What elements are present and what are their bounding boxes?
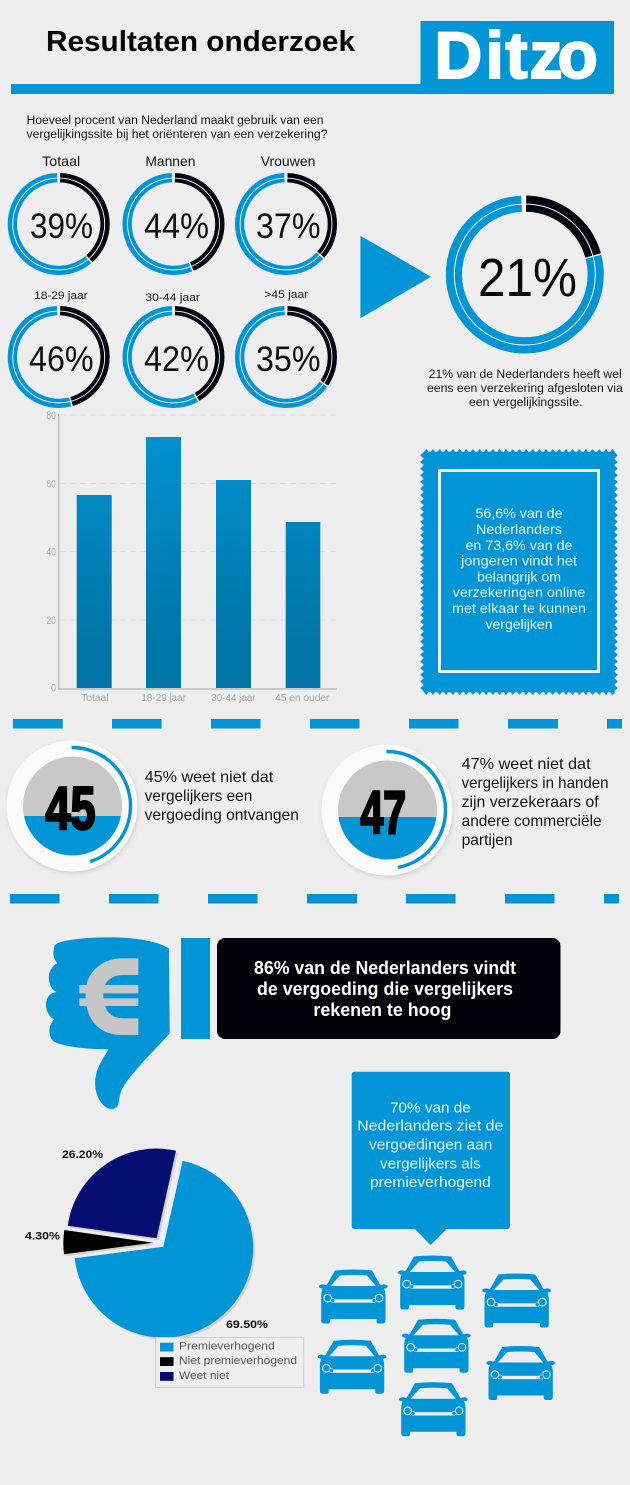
callout: stamp with 56,6% text: Nederlanders xyxy=(476,521,562,537)
pie labels: 69.50% xyxy=(226,1319,268,1331)
donut: Totaal 39%: 39% xyxy=(30,207,93,246)
gauge: 45 xyxy=(6,740,138,874)
gauge: 45: 45 xyxy=(46,775,96,842)
donut: Mannen 44%: Mannen xyxy=(145,153,195,169)
legend: Weet niet xyxy=(179,1370,229,1382)
donut: Totaal 39%: Totaal xyxy=(42,153,80,169)
legend: Niet premieverhogend xyxy=(179,1355,297,1367)
gauge: 47: 47 xyxy=(360,779,406,846)
icon group: cars xyxy=(318,1256,555,1436)
pie slice: Weet niet xyxy=(68,1149,176,1238)
donut: Vrouwen 37% xyxy=(237,153,335,273)
callout: 86% black box: rekenen te hoog xyxy=(313,1000,451,1020)
callout: stamp with 56,6% text: vergelijken xyxy=(486,616,552,632)
callout: 70% speech bubble: Nederlanders ziet de xyxy=(357,1119,503,1135)
chart x axis labels: 18-29 jaar xyxy=(141,693,187,704)
callout: stamp with 56,6% text: jongeren vindt het xyxy=(460,552,577,568)
legend xyxy=(156,1338,304,1388)
chart y axis labels: 80 xyxy=(46,410,56,422)
donut: 18-29 jaar 46%: 18-29 jaar xyxy=(34,290,88,302)
title: Resultaten onderzoek xyxy=(46,26,356,58)
callout: stamp with 56,6% text xyxy=(420,449,618,695)
chart y axis labels: 20 xyxy=(46,615,56,627)
text: 45% xyxy=(145,769,299,824)
donut: 30-44 jaar 42%: 30-44 jaar xyxy=(145,292,200,304)
question text xyxy=(26,115,328,141)
chart x axis labels: 30-44 jaar xyxy=(211,693,256,704)
pie labels: 26.20% xyxy=(62,1149,103,1161)
logo: Ditzo: Ditzo xyxy=(434,18,598,92)
pie slice: Premieverhogend xyxy=(75,1161,253,1338)
chart y axis labels: 0 xyxy=(51,682,56,694)
text: 47%: 47% weet niet dat xyxy=(462,756,591,773)
chart y axis labels xyxy=(46,410,56,694)
donut: Mannen 44%: 44% xyxy=(144,207,209,246)
callout: stamp with 56,6% text: 56,6% van de xyxy=(476,505,563,521)
donut: >45 jaar 35%: 35% xyxy=(256,340,320,379)
donut: Mannen 44% xyxy=(125,153,222,273)
text: 45%: vergelijkers een xyxy=(145,788,252,805)
question text: vergelijkingssite bij het oriënteren van een verzekering? xyxy=(26,129,328,141)
donut: 30-44 jaar 42% xyxy=(125,292,222,406)
donut: >45 jaar 35%: >45 jaar xyxy=(264,289,309,301)
question text: Hoeveel procent van Nederland maakt gebruik van een xyxy=(26,115,324,127)
text: 47%: partijen xyxy=(462,832,513,849)
pie slice: Niet premieverhogend xyxy=(63,1230,153,1254)
chart x axis labels: Totaal xyxy=(81,693,108,704)
text: 21% caption: een vergelijkingssite. xyxy=(469,397,583,409)
callout: 70% speech bubble: 70% van de xyxy=(390,1100,471,1116)
callout: 70% speech bubble xyxy=(352,1072,510,1245)
callout: stamp with 56,6% text: met elkaar te kunnen xyxy=(452,600,586,616)
legend: Premieverhogend xyxy=(179,1340,275,1352)
big donut: 21% xyxy=(450,200,600,350)
text: 47%: vergelijkers in handen xyxy=(462,775,609,792)
text: 47% xyxy=(462,756,609,849)
donut: >45 jaar 35% xyxy=(237,289,335,406)
chart y axis labels: 40 xyxy=(46,546,56,558)
text: 21% caption xyxy=(427,369,623,409)
text: 45%: 45% weet niet dat xyxy=(145,769,274,786)
donut: Totaal 39% xyxy=(10,153,107,273)
gauge: 47 xyxy=(322,744,454,878)
donut: 18-29 jaar 46% xyxy=(10,290,107,406)
donut: 18-29 jaar 46%: 46% xyxy=(29,340,94,379)
text: 45%: vergoeding ontvangen xyxy=(145,807,299,824)
chart x axis labels: 45 en ouder xyxy=(275,693,330,704)
callout: stamp with 56,6% text: belangrijk om xyxy=(477,568,561,584)
chart bars xyxy=(77,437,320,688)
thumb cuff block xyxy=(181,938,210,1039)
chart x axis labels xyxy=(81,693,330,704)
donut: 30-44 jaar 42%: 42% xyxy=(144,340,209,379)
icon: thumbs down with euro xyxy=(46,937,170,1109)
text: 21% caption: 21% van de Nederlanders heeft wel xyxy=(429,369,622,381)
pie chart xyxy=(25,1149,268,1340)
text: 47%: andere commerciële xyxy=(462,813,602,830)
callout: 70% speech bubble: vergelijkers als xyxy=(380,1156,481,1172)
callout: stamp with 56,6% text: en 73,6% van de xyxy=(466,537,573,553)
callout: 70% speech bubble: vergoedingen aan xyxy=(369,1137,492,1153)
header bar xyxy=(11,84,614,94)
donut: Vrouwen 37%: 37% xyxy=(256,207,320,246)
callout: 70% speech bubble: premieverhogend xyxy=(370,1175,491,1191)
donut: Vrouwen 37%: Vrouwen xyxy=(261,153,315,169)
text: 21% caption: eens een verzekering afgesloten via xyxy=(427,383,623,395)
chart y axis labels: 60 xyxy=(46,478,56,490)
bar chart xyxy=(46,410,337,704)
pie labels: 4.30% xyxy=(25,1230,60,1242)
callout: 86% black box: de vergoeding die vergelijkers xyxy=(257,979,513,999)
pie labels xyxy=(25,1149,268,1331)
callout: stamp with 56,6% text: verzekeringen online xyxy=(453,584,586,600)
arrow: triangle to big donut xyxy=(360,236,431,318)
big donut: 21%: 21% xyxy=(478,248,577,308)
text: 47%: zijn verzekeraars of xyxy=(462,794,599,811)
callout: 86% black box: 86% van de Nederlanders vindt xyxy=(254,958,516,978)
callout: 86% black box xyxy=(217,938,560,1039)
